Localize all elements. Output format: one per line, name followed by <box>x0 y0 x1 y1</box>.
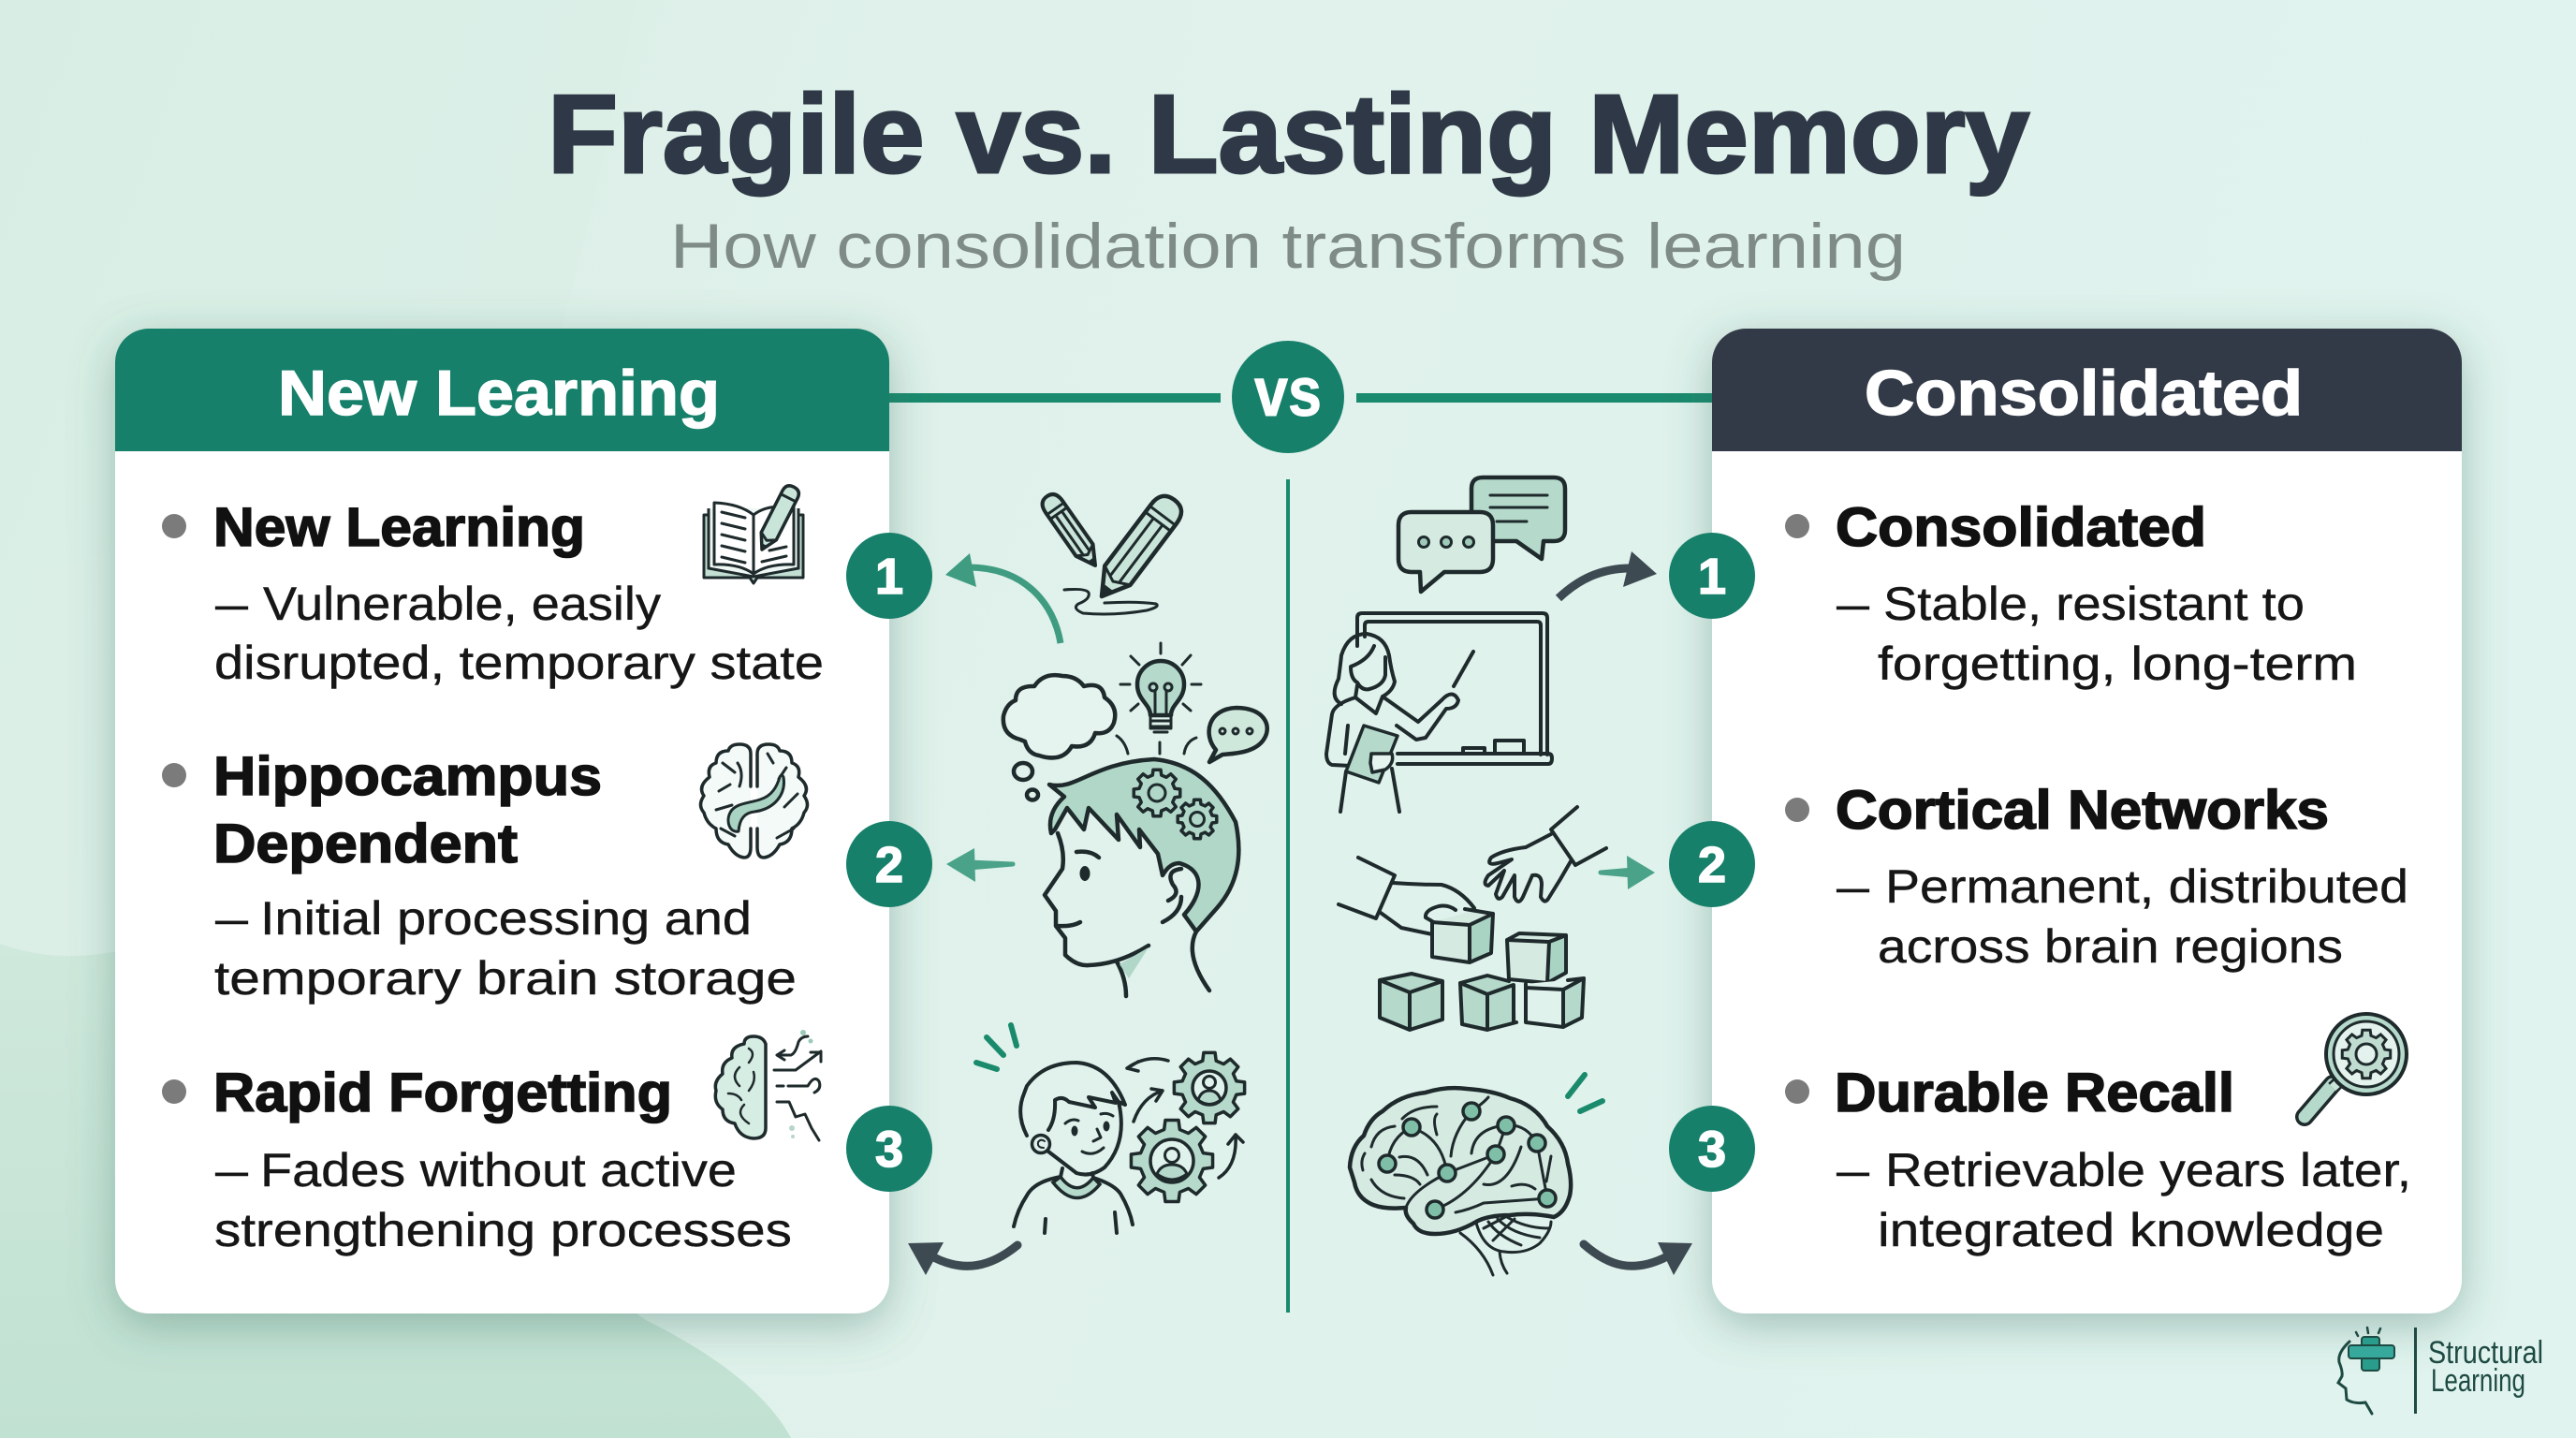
item: rapid forgetting: — <box>215 1144 248 1196</box>
item: hippocampus dependent: Dependent <box>213 814 518 874</box>
item: consolidated <box>1785 497 2357 690</box>
teacher <box>1326 634 1473 812</box>
arrow: curved dark to badge 1 right <box>1559 551 1657 598</box>
item: consolidated: forgetting, long-term <box>1878 638 2357 690</box>
block bottom right <box>1526 978 1584 1027</box>
boy head and shoulders <box>1014 1063 1133 1233</box>
illustration: boy with gears <box>976 1025 1245 1233</box>
illustration: hands stacking blocks <box>1339 807 1606 1030</box>
icon: thought cloud <box>1003 675 1115 800</box>
item: consolidated: — <box>1837 578 1869 630</box>
title: Fragile vs. Lasting Memory <box>548 72 2029 197</box>
illustration: networked brain <box>1350 1075 1603 1275</box>
illustration: head with thoughts and gears <box>1003 643 1267 996</box>
item: new learning <box>162 497 824 689</box>
panel header <box>1712 329 2462 451</box>
panel card <box>115 329 889 1313</box>
item: durable recall: — <box>1837 1144 1869 1196</box>
vs badge <box>1232 341 1344 453</box>
sulci <box>1362 1097 1551 1212</box>
icon: speech bubble <box>1209 708 1267 762</box>
number badges: right: 1 <box>1698 549 1726 605</box>
item: durable recall: Retrievable years later, <box>1885 1144 2411 1196</box>
item: consolidated: Stable, resistant to <box>1883 578 2305 630</box>
logo: structural learning <box>2338 1328 2543 1414</box>
number badges: left: 2 <box>875 837 903 893</box>
item: hippocampus dependent: Hippocampus <box>213 746 602 807</box>
icon: fading half brain <box>715 1030 821 1140</box>
arrow: curved green to badge 1 left <box>945 553 1061 643</box>
item: rapid forgetting: Fades without active <box>260 1144 737 1196</box>
item: hippocampus dependent: temporary brain storage <box>214 952 797 1005</box>
illustration: speech bubbles <box>1398 477 1565 592</box>
item: durable recall: integrated knowledge <box>1878 1204 2384 1256</box>
small cycle arrows <box>1127 1059 1243 1178</box>
green emphasis ticks <box>976 1025 1017 1069</box>
item: new learning: disrupted, temporary state <box>214 637 824 689</box>
icon: magnifier with gear <box>2305 1014 2407 1117</box>
network nodes <box>1379 1103 1556 1218</box>
lower hand <box>1339 858 1474 938</box>
panel: consolidated <box>1712 329 2462 1313</box>
number badges: left <box>846 533 932 1192</box>
item: cortical networks: Cortical Networks <box>1836 780 2329 841</box>
panel: new learning <box>115 329 889 1313</box>
arrow: green to badge 2 left <box>946 848 1013 882</box>
block bottom left <box>1380 974 1442 1030</box>
upper hand <box>1485 807 1606 902</box>
icon: brain with hippocampus <box>700 744 807 858</box>
item: cortical networks: — <box>1837 860 1869 913</box>
item: new learning: New Learning <box>213 497 585 558</box>
item: hippocampus dependent <box>162 746 797 1005</box>
number badges: right: 2 <box>1698 837 1726 893</box>
icon: light bulb <box>1117 643 1201 754</box>
block held <box>1432 910 1493 962</box>
item: hippocampus dependent: Initial processing and <box>260 892 752 945</box>
item: new learning: — <box>215 578 248 630</box>
number badges: right <box>1669 533 1755 1192</box>
item: cortical networks <box>1785 780 2408 973</box>
logo: structural learning: Learning <box>2431 1363 2525 1399</box>
icon: book and pencil <box>704 483 803 583</box>
item: rapid forgetting: Rapid Forgetting <box>213 1063 672 1123</box>
number badges: left: 3 <box>875 1122 903 1178</box>
brain outline <box>1350 1088 1571 1234</box>
panel card <box>1712 329 2462 1313</box>
item: durable recall <box>1785 1063 2411 1256</box>
arrow: dark to lower right <box>1584 1242 1692 1275</box>
item: rapid forgetting <box>162 1063 792 1256</box>
whiteboard <box>1357 613 1552 764</box>
illustration: two pencils and scribble <box>1038 491 1187 614</box>
cerebellum and stem <box>1460 1217 1551 1275</box>
item: hippocampus dependent: — <box>215 892 248 945</box>
header label: New Learning <box>278 358 720 429</box>
header label: Consolidated <box>1865 358 2303 429</box>
arrow: green to badge 2 right <box>1601 856 1655 889</box>
item: new learning: Vulnerable, easily <box>263 578 661 630</box>
head: hair <box>1049 759 1238 932</box>
gear with person, top <box>1174 1052 1245 1123</box>
panel header <box>115 329 889 451</box>
head: face and neck <box>1045 833 1209 996</box>
item: consolidated: Consolidated <box>1836 497 2206 558</box>
item: cortical networks: Permanent, distributed <box>1885 860 2408 913</box>
gear with person, bottom <box>1131 1120 1213 1202</box>
connector line to vs badge <box>889 393 1712 1313</box>
item: rapid forgetting: strengthening processes <box>214 1204 792 1256</box>
green emphasis ticks <box>1568 1075 1603 1111</box>
vs badge: vs <box>1254 353 1322 431</box>
logo wordmark: Structural <box>2428 1335 2543 1371</box>
head: gears <box>1134 770 1180 816</box>
number badges: right: 3 <box>1698 1122 1726 1178</box>
item: cortical networks: across brain regions <box>1878 920 2343 973</box>
logo mark <box>2338 1328 2394 1414</box>
illustration: teacher at whiteboard <box>1326 613 1552 812</box>
arrow: dark to lower left <box>908 1242 1017 1275</box>
block bottom middle <box>1460 976 1516 1030</box>
logo divider <box>2414 1328 2417 1414</box>
item: durable recall: Durable Recall <box>1835 1063 2234 1123</box>
block upper stack <box>1507 933 1566 983</box>
subtitle: How consolidation transforms learning <box>670 211 1906 282</box>
number badges: left: 1 <box>875 549 903 605</box>
